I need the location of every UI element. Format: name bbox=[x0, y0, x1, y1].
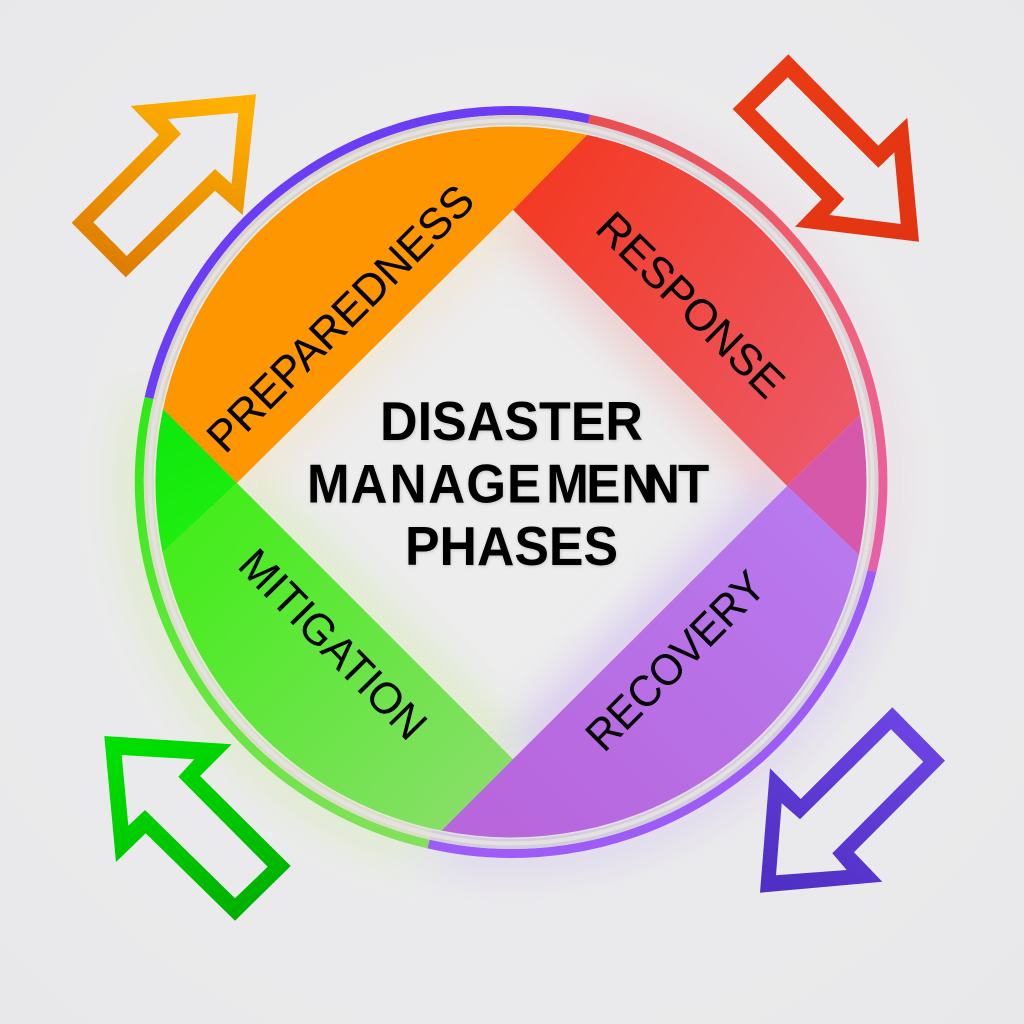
segment: response-recovery overlap bbox=[787, 415, 866, 555]
inner pale ring bbox=[149, 120, 873, 844]
arrow: mitigation bbox=[104, 736, 291, 921]
segment: response bbox=[513, 134, 860, 486]
label: mitigation: MITIGATION bbox=[229, 540, 436, 750]
title bbox=[307, 390, 709, 577]
phase wheel bbox=[156, 126, 866, 838]
phase labels bbox=[198, 176, 794, 761]
segment: recovery bbox=[442, 486, 859, 838]
outer colour glow bbox=[139, 119, 883, 853]
diamond inner glow bbox=[237, 210, 787, 759]
outer ring bbox=[139, 111, 883, 853]
label: recovery: RECOVERY bbox=[576, 562, 775, 761]
segment: mitigation bbox=[162, 483, 513, 831]
label: preparedness: PREPAREDNESS bbox=[198, 176, 484, 462]
segment: preparedness-mitigation overlap bbox=[156, 409, 237, 552]
center diamond bbox=[237, 210, 787, 759]
arrow: preparedness bbox=[72, 94, 256, 277]
title: PHASES bbox=[405, 515, 618, 577]
label: response: RESPONSE bbox=[586, 202, 794, 408]
title: DISASTER bbox=[380, 390, 643, 452]
segment: preparedness bbox=[163, 126, 588, 483]
arrow: recovery bbox=[760, 707, 945, 893]
arrow: response bbox=[733, 54, 919, 242]
title: MANAGEMENNT bbox=[307, 454, 709, 515]
